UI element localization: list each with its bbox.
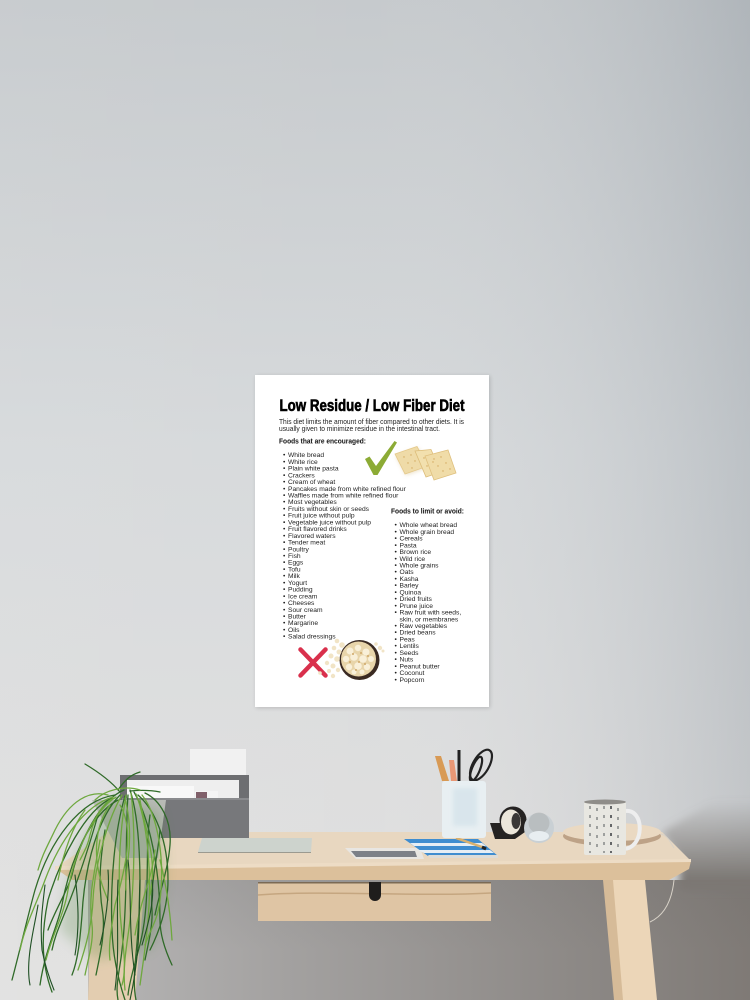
- list: foods to limit: •: [394, 603, 398, 610]
- list: foods encouraged: •: [283, 587, 286, 594]
- list: foods to limit: •: [394, 677, 398, 684]
- cable: [650, 880, 674, 922]
- intro text: usually given to minimize residue in the intestinal tract.: [279, 424, 440, 433]
- list: foods to limit: •: [394, 589, 398, 596]
- list: foods encouraged: •: [283, 620, 286, 627]
- list: foods encouraged: •: [283, 513, 286, 520]
- list: foods encouraged: •: [283, 452, 286, 459]
- list: foods encouraged: •: [283, 607, 286, 614]
- list: foods encouraged: White bread: [288, 452, 324, 459]
- list: foods to limit: Quinoa: [400, 589, 421, 596]
- list: foods encouraged: •: [283, 499, 286, 506]
- tape dispenser: [490, 806, 526, 839]
- list: foods encouraged: •: [283, 566, 286, 573]
- list: foods encouraged: Fruits without skin or seeds: [288, 506, 370, 513]
- list: foods encouraged: Pancakes made from white refined flour: [288, 486, 407, 493]
- list: foods to limit: Raw fruit with seeds,: [400, 610, 461, 617]
- list: foods encouraged: Fish: [288, 553, 301, 560]
- top surface: [55, 832, 691, 868]
- list: foods to limit: Peanut butter: [400, 663, 440, 670]
- list: foods encouraged: Milk: [288, 573, 301, 580]
- image: crackers: [395, 446, 456, 480]
- list: foods encouraged: Fruit juice without pulp: [288, 513, 355, 520]
- list: foods to limit: •: [394, 610, 398, 617]
- list: foods encouraged: •: [283, 486, 286, 493]
- list: foods to limit: Brown rice: [400, 549, 431, 556]
- list: foods encouraged: •: [283, 472, 286, 479]
- list: foods encouraged: •: [283, 573, 286, 580]
- list: foods encouraged: •: [283, 600, 286, 607]
- list: foods to limit: Dried fruits: [400, 596, 432, 603]
- list: foods encouraged: Yogurt: [288, 580, 307, 587]
- list: foods encouraged: Most vegetables: [288, 499, 337, 506]
- list: foods to limit: •: [394, 569, 398, 576]
- list: foods encouraged: Tofu: [288, 566, 301, 573]
- list: foods to limit: Coconut: [400, 670, 425, 677]
- pamphlet: [198, 838, 312, 853]
- right legs: [603, 880, 626, 1000]
- list: foods to limit: •: [394, 583, 398, 590]
- list: foods to limit: •: [394, 556, 398, 563]
- list: foods to limit: skin, or membranes: [400, 616, 459, 623]
- list: foods to limit: Kasha: [400, 576, 419, 583]
- list: foods to limit: Nuts: [400, 657, 414, 664]
- list: foods to limit: •: [394, 623, 398, 630]
- list: foods encouraged: •: [283, 546, 286, 553]
- list: foods to limit: Barley: [400, 583, 419, 590]
- list: foods to limit: Prune juice: [400, 603, 433, 610]
- plant: [12, 764, 172, 1000]
- list: foods to limit: •: [394, 536, 398, 543]
- pen holder with pencils and scissors: [435, 746, 496, 838]
- list: foods to limit: Raw vegetables: [400, 623, 448, 630]
- list: foods encouraged: Plain white pasta: [288, 466, 339, 473]
- list: foods to limit: Whole grain bread: [400, 529, 454, 536]
- list: foods encouraged: •: [283, 506, 286, 513]
- poster: [255, 375, 490, 708]
- list: foods encouraged: Oils: [288, 627, 300, 634]
- list: foods encouraged: Cream of wheat: [288, 479, 335, 486]
- list: foods to limit: •: [394, 650, 398, 657]
- open booklet: [345, 848, 424, 859]
- drawer: [258, 882, 491, 921]
- desk: [55, 832, 691, 1000]
- list: foods encouraged: Eggs: [288, 560, 304, 567]
- blue striped notebook: [404, 838, 498, 858]
- list: foods encouraged: Poultry: [288, 546, 309, 553]
- list: foods to limit: •: [394, 636, 398, 643]
- list: foods encouraged: Vegetable juice without pulp: [288, 519, 371, 526]
- list: foods encouraged: White rice: [288, 459, 318, 466]
- list: foods encouraged: Flavored waters: [288, 533, 336, 540]
- plant pot: [92, 800, 166, 858]
- list: foods encouraged: •: [283, 580, 286, 587]
- list: foods encouraged: Sour cream: [288, 607, 323, 614]
- list: foods encouraged: •: [283, 479, 286, 486]
- list: foods to limit: Seeds: [400, 650, 419, 657]
- letter organizer: [120, 749, 249, 838]
- list: foods to limit: Oats: [400, 569, 414, 576]
- list: foods to limit: [394, 522, 461, 684]
- list: foods encouraged: •: [283, 533, 286, 540]
- list: foods to limit: •: [394, 576, 398, 583]
- list: foods encouraged: •: [283, 634, 286, 641]
- image: popcorn bowl: [318, 639, 384, 680]
- list: foods encouraged: •: [283, 526, 286, 533]
- list: foods to limit: •: [394, 630, 398, 637]
- list: foods to limit: Cereals: [400, 536, 423, 543]
- list: foods encouraged: Tender meat: [288, 540, 325, 547]
- list: foods encouraged: •: [283, 627, 286, 634]
- list: foods encouraged: [283, 452, 407, 641]
- intro text: [279, 417, 464, 433]
- back left leg: [88, 880, 145, 1000]
- wireless charger: [563, 823, 674, 848]
- intro text: This diet limits the amount of fiber compared to other diets. It is: [279, 417, 464, 426]
- list: foods encouraged: •: [283, 560, 286, 567]
- list: foods encouraged: •: [283, 593, 286, 600]
- list: foods encouraged: Margarine: [288, 620, 318, 627]
- list: foods encouraged: Cheeses: [288, 600, 315, 607]
- list: foods to limit: Dried beans: [400, 630, 436, 637]
- glass sphere: [524, 812, 554, 843]
- list: foods to limit: •: [394, 529, 398, 536]
- list: foods to limit: Peas: [400, 636, 415, 643]
- icon: green check mark: [365, 441, 397, 475]
- list: foods encouraged: Waffles made from white refined flour: [288, 492, 399, 500]
- heading: foods encouraged: Foods that are encouraged:: [279, 436, 366, 446]
- list: foods encouraged: •: [283, 459, 286, 466]
- list: foods to limit: •: [394, 670, 398, 677]
- list: foods to limit: Popcorn: [400, 677, 425, 684]
- list: foods to limit: •: [394, 549, 398, 556]
- list: foods to limit: Whole grains: [400, 562, 439, 570]
- list: foods encouraged: •: [283, 614, 286, 620]
- list: foods encouraged: •: [283, 519, 286, 526]
- list: foods encouraged: •: [283, 466, 286, 473]
- list: foods to limit: •: [394, 542, 398, 549]
- list: foods to limit: •: [394, 643, 398, 650]
- list: foods encouraged: Pudding: [288, 587, 313, 594]
- list: foods to limit: Pasta: [400, 542, 417, 549]
- list: foods to limit: •: [394, 663, 398, 670]
- list: foods to limit: Lentils: [400, 643, 419, 650]
- list: foods encouraged: Salad dressings: [288, 634, 336, 641]
- list: foods encouraged: Fruit flavored drinks: [288, 526, 347, 533]
- list: foods to limit: •: [394, 562, 398, 570]
- list: foods encouraged: Crackers: [288, 472, 315, 479]
- icon: red cross: [300, 650, 326, 676]
- list: foods encouraged: Ice cream: [288, 593, 318, 600]
- patterned mug: [584, 800, 640, 855]
- list: foods encouraged: Butter: [288, 614, 307, 620]
- list: foods to limit: •: [394, 522, 398, 529]
- list: foods encouraged: •: [283, 492, 286, 500]
- heading: foods to limit: Foods to limit or avoid:: [391, 506, 464, 516]
- list: foods to limit: •: [394, 596, 398, 603]
- list: foods to limit: Wild rice: [400, 556, 425, 563]
- list: foods to limit: •: [394, 657, 398, 664]
- list: foods encouraged: •: [283, 540, 286, 547]
- list: foods to limit: Whole wheat bread: [400, 522, 457, 529]
- list: foods encouraged: •: [283, 553, 286, 560]
- title: Low Residue / Low Fiber Diet: [280, 397, 465, 415]
